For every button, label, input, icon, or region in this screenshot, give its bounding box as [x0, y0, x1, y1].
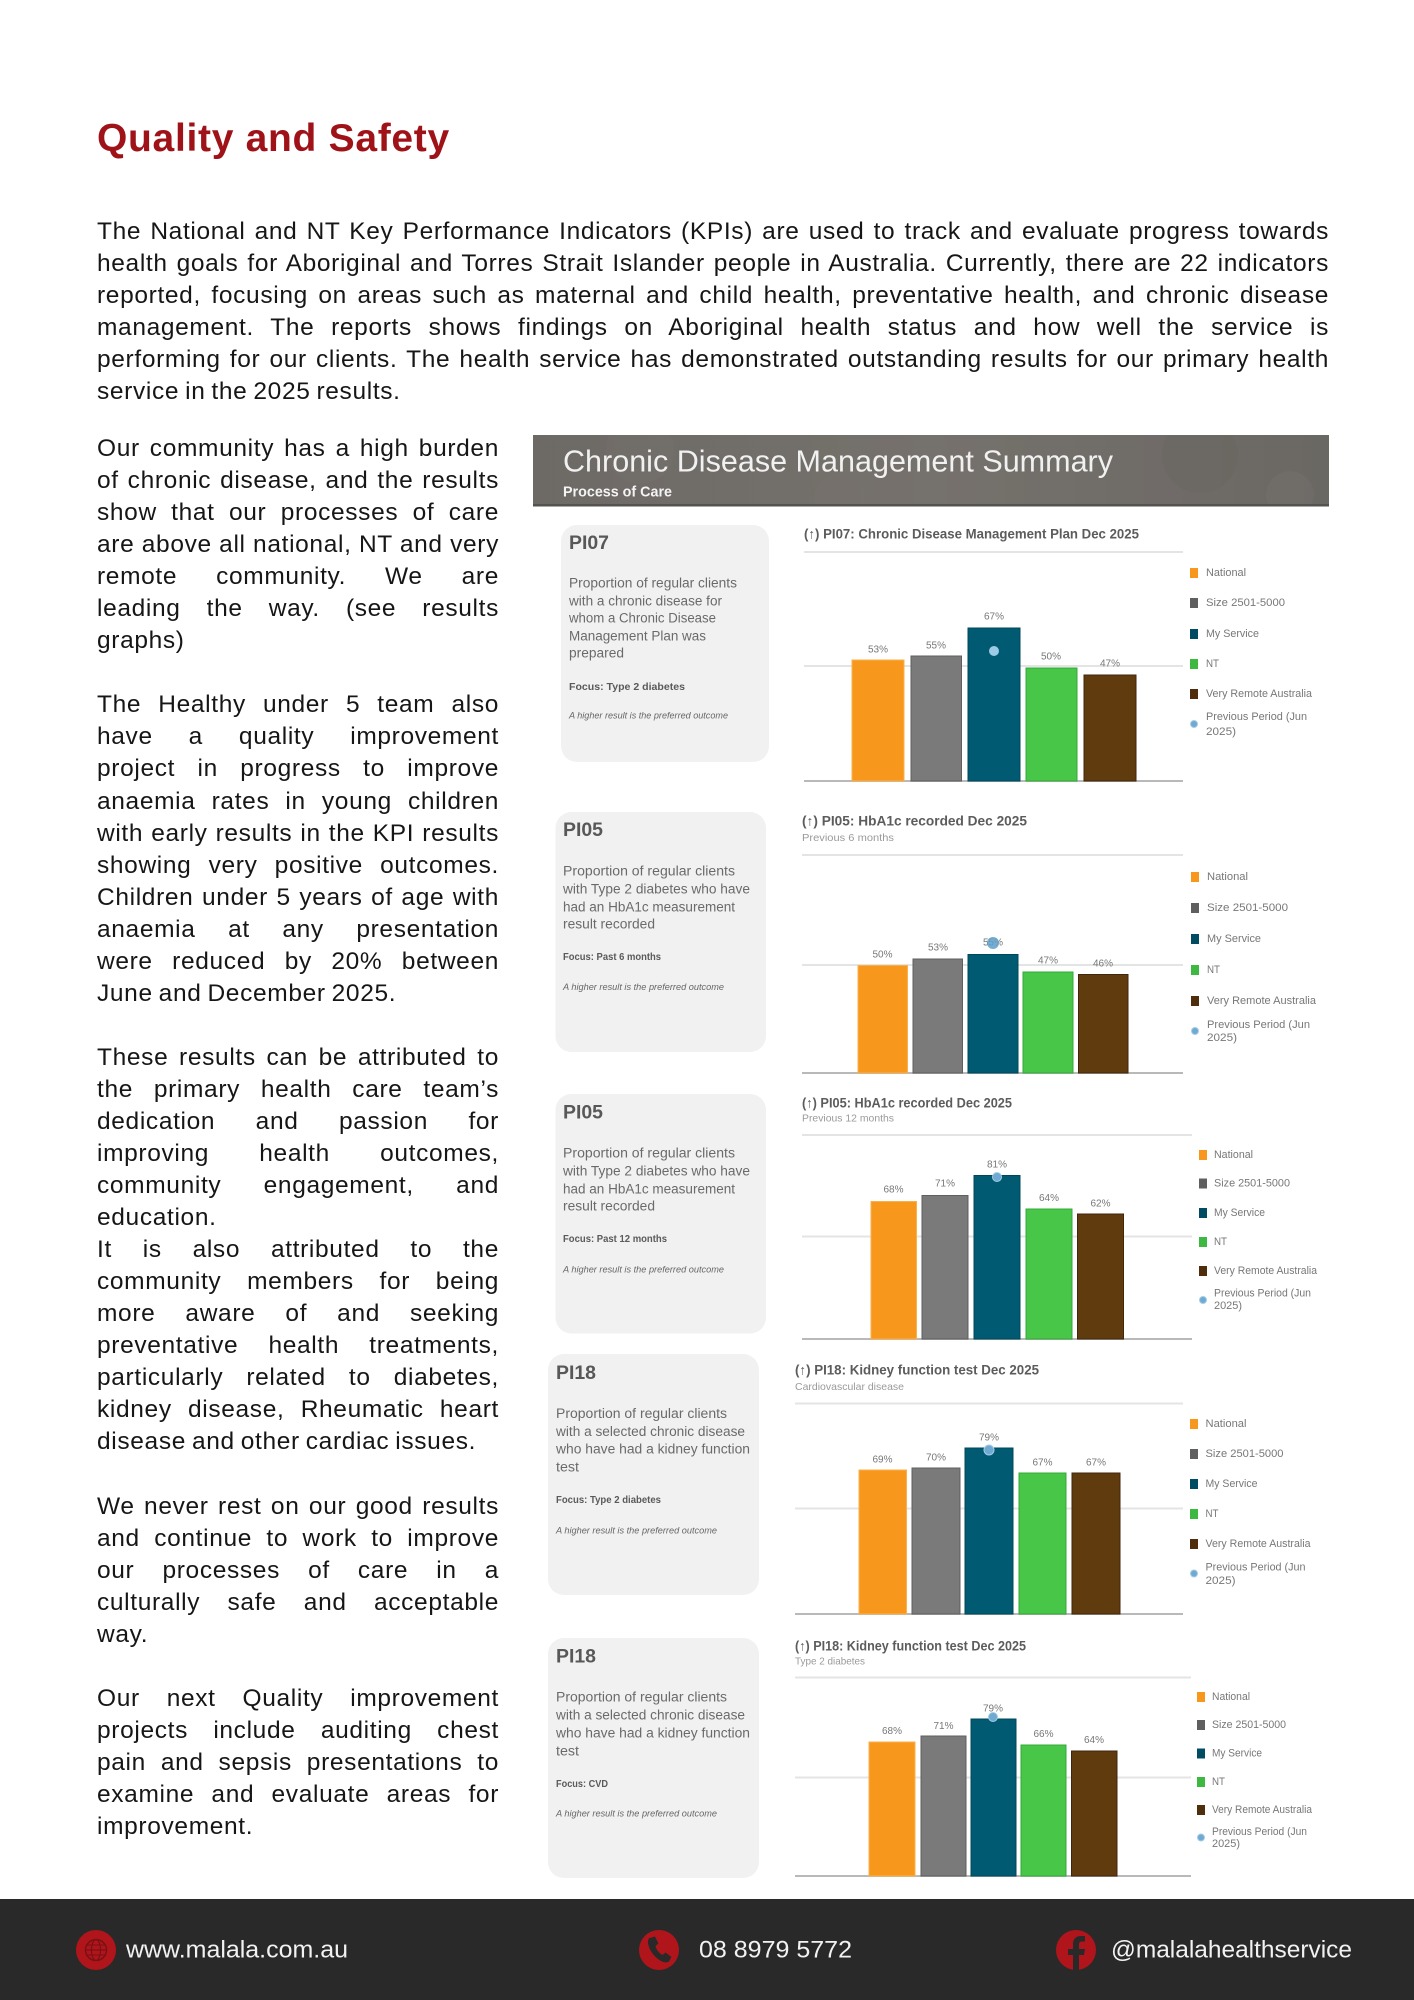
card: PI18 CVD description — [548, 1638, 759, 1878]
bar chart: PI07: 53% — [868, 644, 888, 656]
bar chart: PI07: (↑) PI07: Chronic Disease Management Plan Dec 2025 — [804, 526, 1139, 542]
bar chart: PI18 cardiovascular disease: 70% — [926, 1452, 946, 1464]
card: PI18 CVD description: Focus: CVD — [556, 1778, 608, 1790]
legend: PI05 6 months: Very Remote Australia — [1207, 995, 1317, 1007]
card: PI18 type 2 diabetes description — [548, 1354, 759, 1595]
bar chart: PI18 type 2 diabetes: 71% — [933, 1721, 954, 1732]
card: PI07 description — [561, 525, 769, 762]
bar chart: PI18 type 2 diabetes: 68% — [882, 1726, 902, 1737]
card: PI18 type 2 diabetes description: who have had a kidney function — [555, 1442, 750, 1456]
bar chart: PI18 cardiovascular disease: Cardiovascular disease — [795, 1381, 904, 1393]
legend: PI07: National — [1206, 567, 1246, 579]
legend: PI18 type 2 diabetes — [1197, 1691, 1313, 1850]
text block: left column narrative: anaemia at any presentation — [97, 916, 499, 943]
legend: PI18 type 2 diabetes: Previous Period (Jun — [1212, 1826, 1307, 1838]
legend: PI18 cardiovascular disease: My Service — [1206, 1478, 1258, 1490]
card: PI07 description: whom a Chronic Disease — [568, 610, 716, 626]
bar chart: PI05 12 months — [802, 1096, 1192, 1339]
panel: chronic disease management summary dashboard — [0, 435, 1414, 2000]
bar chart: PI07: 50% — [1041, 652, 1061, 662]
text block: left column narrative: preventative health treatments, — [97, 1332, 499, 1359]
bar chart: PI05 6 months: Previous 6 months — [802, 832, 894, 844]
text block: left column narrative — [97, 435, 499, 1840]
text block: left column narrative: improvement. — [97, 1813, 253, 1840]
bar chart: PI18 cardiovascular disease: 67% — [1032, 1458, 1053, 1468]
bar chart: PI05 6 months: 50% — [872, 950, 893, 960]
bar chart: PI07: 67% — [984, 612, 1004, 622]
text block: intro paragraph: management. The reports shows findings on Aboriginal health status and how well the service is — [97, 314, 1329, 341]
legend: PI18 cardiovascular disease: Very Remote Australia — [1206, 1538, 1311, 1550]
text block: intro paragraph: health goals for Aboriginal and Torres Strait Islander people in Australia. Currently, there are 22 indicators — [97, 250, 1329, 277]
card: PI07 description: PI07 — [569, 533, 609, 554]
card: PI18 CVD description: with a selected chronic disease — [555, 1708, 745, 1722]
text block: left column narrative: Our community has a high burden — [97, 435, 499, 462]
bar chart: PI07: 55% — [926, 640, 946, 652]
icon: phone — [639, 1930, 679, 1970]
legend: PI18 cardiovascular disease: 2025) — [1206, 1575, 1236, 1587]
text block: left column narrative: community engagement, and — [97, 1172, 499, 1199]
bar chart: PI05 12 months: 64% — [1039, 1193, 1059, 1204]
banner: Chronic Disease Management Summary: Chronic Disease Management Summary — [563, 444, 1113, 478]
card: PI18 CVD description: A higher result is the preferred outcome — [555, 1808, 717, 1820]
title: Quality and Safety — [97, 117, 450, 160]
card: PI05 past 6 months description: PI05 — [563, 820, 603, 841]
text block: left column narrative: Our next Quality improvement — [97, 1685, 499, 1712]
panel: PI18 kidney function test type 2 diabetes — [548, 1638, 1313, 1878]
text block: left column narrative: June and December 2025. — [97, 980, 396, 1007]
text block: left column narrative: of chronic disease, and the results — [97, 467, 499, 494]
text block: left column narrative: The Healthy under 5 team also — [97, 691, 499, 718]
text block: left column narrative: were reduced by 20% between — [97, 948, 499, 975]
legend: PI05 12 months: National — [1214, 1149, 1253, 1161]
text block: intro paragraph: The National and NT Key Performance Indicators (KPIs) are used to track and evaluate progress towards — [97, 218, 1329, 244]
text block: left column narrative: with early results in the KPI results — [97, 820, 499, 847]
text block: intro paragraph: service in the 2025 results. — [97, 378, 401, 405]
legend: PI05 6 months: National — [1207, 871, 1248, 883]
text block: left column narrative: showing very positive outcomes. — [97, 852, 499, 879]
card: PI05 past 12 months description: Focus: Past 12 months — [563, 1233, 667, 1245]
legend: PI05 6 months: Previous Period (Jun — [1207, 1019, 1310, 1031]
bar chart: PI18 cardiovascular disease: 79% — [979, 1432, 999, 1444]
text block: left column narrative: graphs) — [97, 627, 185, 654]
bar chart: PI05 12 months: 62% — [1090, 1198, 1111, 1210]
bar chart: PI05 12 months: 71% — [935, 1178, 955, 1190]
card: PI05 past 12 months description: A higher result is the preferred outcome — [562, 1264, 724, 1276]
banner: Chronic Disease Management Summary: Process of Care — [563, 484, 672, 500]
bar chart: PI18 type 2 diabetes: (↑) PI18: Kidney function test Dec 2025 — [795, 1638, 1026, 1654]
text block: left column narrative: way. — [97, 1621, 148, 1648]
legend: PI07: Previous Period (Jun — [1206, 711, 1307, 723]
bar chart: PI18 type 2 diabetes: 64% — [1084, 1735, 1104, 1746]
card: PI07 description: Focus: Type 2 diabetes — [569, 681, 685, 693]
text block: left column narrative: our processes of care in a — [97, 1557, 499, 1584]
bar chart: PI07: 47% — [1100, 658, 1120, 670]
card: PI18 CVD description: who have had a kidney function — [555, 1726, 750, 1740]
text block: left column narrative: have a quality improvement — [97, 723, 499, 750]
card: PI05 past 6 months description: Proportion of regular clients — [563, 864, 735, 878]
legend: PI18 cardiovascular disease: NT — [1206, 1508, 1219, 1520]
bar chart: PI05 12 months: 68% — [883, 1184, 904, 1196]
legend: PI05 6 months: NT — [1207, 964, 1220, 976]
legend: PI05 6 months — [1191, 871, 1317, 1044]
legend: PI07: NT — [1206, 658, 1219, 670]
text block: left column narrative: project in progress to improve — [97, 755, 499, 782]
icon: facebook — [1056, 1930, 1096, 1970]
legend: PI07 — [1190, 567, 1313, 738]
legend: PI05 6 months: Size 2501-5000 — [1207, 902, 1288, 914]
text block: left column narrative: anaemia rates in young children — [97, 788, 499, 815]
panel: PI05 HbA1c previous 6 months — [556, 812, 1317, 1073]
legend: PI05 6 months: My Service — [1207, 933, 1261, 945]
social handle text: @malalahealthservice — [1111, 1936, 1352, 1964]
legend: PI18 cardiovascular disease — [1190, 1418, 1311, 1587]
phone number text: 08 8979 5772 — [699, 1936, 852, 1964]
bar chart: PI18 type 2 diabetes: 79% — [983, 1704, 1003, 1714]
card: PI05 past 6 months description: had an HbA1c measurement — [563, 900, 735, 914]
bar chart: PI05 6 months: 46% — [1093, 958, 1113, 970]
legend: PI18 type 2 diabetes: National — [1212, 1691, 1250, 1703]
legend: PI07: Size 2501-5000 — [1206, 597, 1285, 609]
legend: PI05 12 months: Previous Period (Jun — [1214, 1288, 1311, 1300]
text block: left column narrative: Children under 5 years of age with — [97, 884, 499, 911]
bar chart: PI18 type 2 diabetes — [795, 1638, 1191, 1876]
card: PI05 past 12 months description: with Type 2 diabetes who have — [562, 1164, 750, 1178]
website text: www.malala.com.au — [125, 1936, 348, 1964]
text block: left column narrative: examine and evaluate areas for — [97, 1781, 499, 1808]
card: PI05 past 6 months description: A higher result is the preferred outcome — [562, 982, 724, 993]
card: PI05 past 6 months description: Focus: Past 6 months — [563, 951, 661, 963]
text block: left column narrative: disease and other cardiac issues. — [97, 1428, 476, 1455]
text block: left column narrative: particularly related to diabetes, — [97, 1364, 499, 1391]
text block: left column narrative: education. — [97, 1204, 217, 1231]
legend: PI07: My Service — [1206, 628, 1259, 640]
bar chart: PI05 6 months — [802, 814, 1183, 1073]
bar chart: PI18 type 2 diabetes: Type 2 diabetes — [795, 1656, 865, 1668]
text block: left column narrative: leading the way. (see results — [97, 595, 499, 622]
card: PI07 description: A higher result is the preferred outcome — [568, 710, 728, 722]
text block: left column narrative: more aware of and seeking — [97, 1300, 499, 1327]
legend: PI07: Very Remote Australia — [1206, 688, 1313, 700]
text block: left column narrative: improving health outcomes, — [97, 1140, 499, 1167]
bar chart: PI05 6 months: 47% — [1038, 956, 1058, 966]
text block: left column narrative: kidney disease, Rheumatic heart — [97, 1396, 499, 1423]
legend: PI05 12 months — [1199, 1149, 1318, 1312]
bar chart: PI05 12 months: 81% — [987, 1160, 1007, 1170]
legend: PI05 12 months: NT — [1214, 1236, 1227, 1248]
text block: left column narrative: It is also attributed to the — [97, 1236, 499, 1263]
legend: PI18 type 2 diabetes: 2025) — [1212, 1838, 1240, 1850]
legend: PI18 cardiovascular disease: Size 2501-5000 — [1206, 1448, 1284, 1460]
text block: left column narrative: and continue to work to improve — [97, 1525, 499, 1552]
card: PI05 past 12 months description: had an HbA1c measurement — [563, 1182, 735, 1196]
text block: left column narrative: These results can be attributed to — [97, 1044, 499, 1071]
text block: left column narrative: pain and sepsis presentations to — [97, 1749, 499, 1776]
bar chart: PI05 12 months: Previous 12 months — [802, 1112, 894, 1124]
panel: PI07 chronic disease management plan — [561, 525, 1313, 781]
legend: PI05 12 months: 2025) — [1214, 1300, 1242, 1312]
text block: left column narrative: dedication and passion for — [97, 1108, 499, 1135]
bar chart: PI18 cardiovascular disease: 69% — [872, 1454, 893, 1466]
card: PI07 description: with a chronic disease for — [568, 594, 723, 608]
text block: left column narrative: show that our processes of care — [97, 499, 499, 526]
icon: globe — [76, 1930, 116, 1970]
card: PI18 type 2 diabetes description: Proportion of regular clients — [556, 1406, 727, 1421]
card: PI05 past 6 months description: with Type 2 diabetes who have — [562, 882, 750, 896]
banner: Chronic Disease Management Summary — [533, 435, 1329, 506]
legend: PI18 type 2 diabetes: My Service — [1212, 1748, 1262, 1760]
card: PI05 past 12 months description: PI05 — [563, 1102, 603, 1124]
card: PI05 past 12 months description: result recorded — [563, 1198, 655, 1214]
bar chart: PI18 type 2 diabetes: 66% — [1033, 1729, 1054, 1740]
bar chart: PI05 6 months: (↑) PI05: HbA1c recorded Dec 2025 — [802, 814, 1027, 828]
legend: PI05 12 months: My Service — [1214, 1207, 1265, 1219]
bar chart: PI05 12 months: (↑) PI05: HbA1c recorded Dec 2025 — [802, 1096, 1012, 1110]
legend: PI18 type 2 diabetes: Size 2501-5000 — [1212, 1719, 1286, 1731]
legend: PI18 type 2 diabetes: Very Remote Australia — [1212, 1804, 1313, 1816]
legend: PI05 12 months: Size 2501-5000 — [1214, 1178, 1290, 1190]
card: PI18 CVD description: test — [556, 1744, 579, 1758]
card: PI05 past 6 months description: result recorded — [563, 916, 655, 932]
card: PI18 CVD description: Proportion of regular clients — [556, 1690, 727, 1704]
card: PI05 past 12 months description — [556, 1094, 766, 1334]
card: PI18 type 2 diabetes description: with a selected chronic disease — [555, 1424, 745, 1439]
text block: intro paragraph: performing for our clients. The health service has demonstrated outstanding results for our primary health — [97, 346, 1329, 373]
text block: left column narrative: the primary health care team’s — [97, 1076, 499, 1103]
card: PI05 past 12 months description: Proportion of regular clients — [563, 1146, 735, 1160]
text block: left column narrative: are above all national, NT and very — [97, 531, 499, 558]
text block: left column narrative: community members for being — [97, 1268, 499, 1295]
card: PI18 type 2 diabetes description: A higher result is the preferred outcome — [555, 1526, 717, 1536]
card: PI18 type 2 diabetes description: Focus: Type 2 diabetes — [556, 1494, 661, 1506]
bar chart: PI05 6 months: 53% — [928, 942, 948, 954]
card: PI05 past 6 months description — [556, 812, 766, 1052]
legend: PI05 6 months: 2025) — [1207, 1032, 1237, 1044]
card: PI07 description: Proportion of regular clients — [569, 576, 737, 590]
bar chart: PI18 cardiovascular disease — [795, 1362, 1183, 1614]
legend: PI07: 2025) — [1206, 726, 1236, 738]
panel: PI18 kidney function test cardiovascular disease — [548, 1354, 1311, 1614]
bar chart: PI07 — [804, 526, 1183, 781]
text block: intro paragraph: reported, focusing on areas such as maternal and child health, preventative health, and chronic disease — [97, 282, 1329, 309]
card: PI18 CVD description: PI18 — [556, 1646, 596, 1668]
bar chart: PI05 6 months: 55% — [983, 938, 1003, 948]
card: PI07 description: prepared — [569, 646, 624, 660]
card: PI18 type 2 diabetes description: test — [556, 1460, 579, 1474]
text block: left column narrative: remote community. We are — [97, 563, 499, 590]
bar chart: PI18 cardiovascular disease: (↑) PI18: Kidney function test Dec 2025 — [795, 1362, 1039, 1378]
bar chart: PI18 cardiovascular disease: 67% — [1086, 1458, 1106, 1468]
legend: PI05 12 months: Very Remote Australia — [1214, 1265, 1318, 1277]
card: PI07 description: Management Plan was — [569, 628, 706, 644]
legend: PI18 type 2 diabetes: NT — [1212, 1776, 1225, 1788]
text block: intro paragraph — [97, 218, 1329, 405]
legend: PI18 cardiovascular disease: National — [1206, 1418, 1246, 1430]
text block: left column narrative: culturally safe and acceptable — [97, 1589, 499, 1616]
panel: PI05 HbA1c previous 12 months — [556, 1094, 1318, 1339]
card: PI18 type 2 diabetes description: PI18 — [556, 1363, 596, 1384]
text block: left column narrative: We never rest on our good results — [97, 1493, 499, 1520]
legend: PI18 cardiovascular disease: Previous Period (Jun — [1206, 1562, 1306, 1574]
text block: left column narrative: projects include auditing chest — [97, 1717, 499, 1744]
footer bar — [0, 1899, 1414, 2000]
